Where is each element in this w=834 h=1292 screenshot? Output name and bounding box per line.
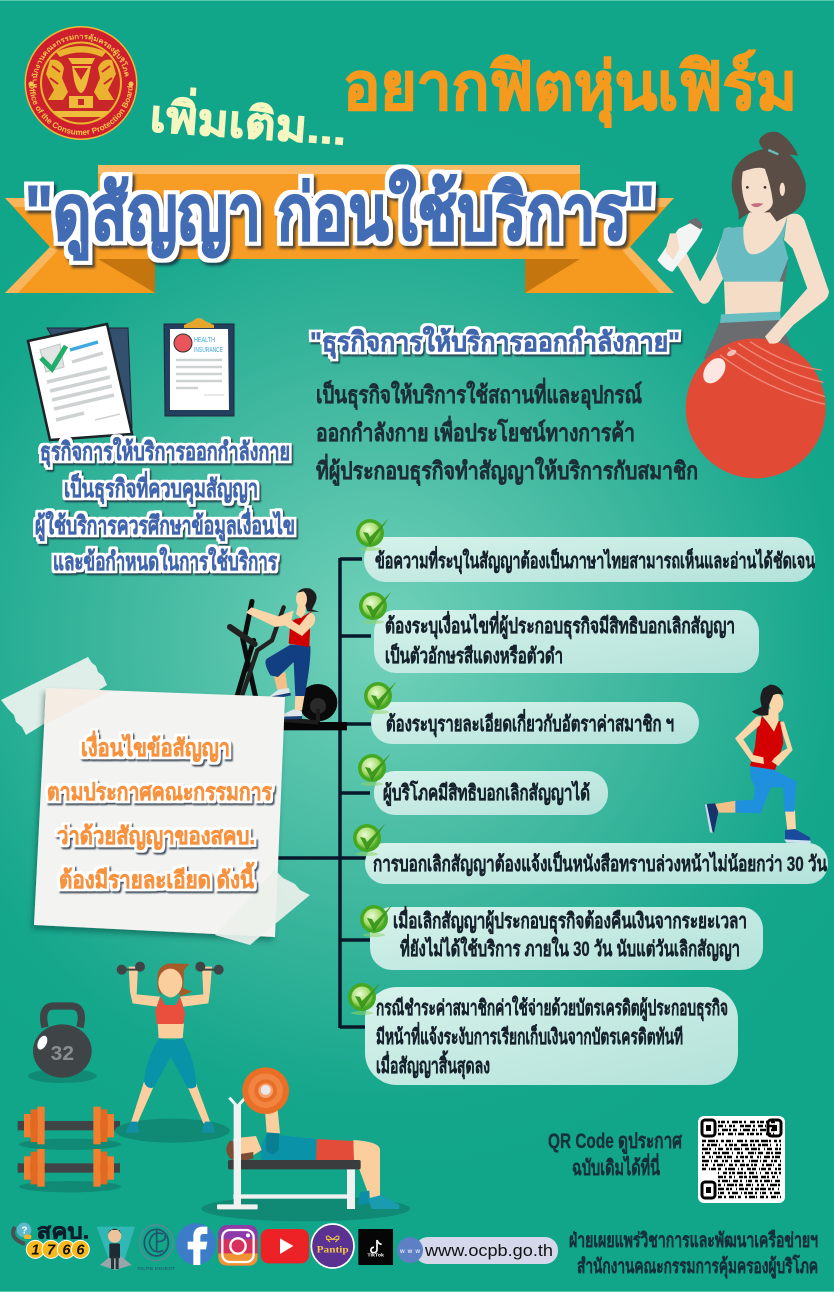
heading: definition of fitness business: "ธุรกิจการให้บริการออกกำลังกาย" bbox=[310, 326, 680, 359]
icon: check 1 bbox=[356, 519, 388, 551]
item 5 bbox=[353, 824, 828, 884]
logo: consumer protection board seal: สำนักงานคณะกรรมการคุ้มครองผู้บริโภค bbox=[32, 34, 129, 88]
title: อยากฟิตหุ่นเฟิร์ม: อยากฟิตหุ่นเฟิร์ม bbox=[343, 49, 797, 128]
item 4: ผู้บริโภคมีสิทธิบอกเลิกสัญญาได้ bbox=[383, 780, 590, 807]
icon: check 2 bbox=[359, 592, 391, 624]
footer: pantip: Pantip bbox=[317, 1245, 349, 1255]
item 6 bbox=[360, 905, 763, 970]
item 2 bbox=[359, 592, 759, 673]
footer: สคบ 1766 hotline: สคบ. bbox=[37, 1219, 89, 1243]
definition paragraph: ที่ผู้ประกอบธุรกิจทำสัญญาให้บริการกับสมาชิก bbox=[316, 453, 698, 487]
footer: instagram bbox=[218, 1225, 258, 1266]
illustration: gym figures (kettlebell, dumbbells, woman lifting, bench press) bbox=[18, 962, 410, 1221]
icon: check 6 bbox=[360, 905, 392, 937]
definition paragraph bbox=[316, 377, 698, 487]
QR code caption: ฉบับเดิมได้ที่นี่ bbox=[572, 1152, 660, 1180]
footer: pantip bbox=[311, 1224, 354, 1268]
note text: contract conditions: เงื่อนไขข้อสัญญา bbox=[81, 730, 230, 762]
item 7: เมื่อสัญญาสิ้นสุดลง bbox=[376, 1050, 490, 1080]
subtitle: เพิ่มเติม: เพิ่มเติม... bbox=[148, 85, 349, 155]
footer: สคบ 1766 hotline: 6 bbox=[76, 1243, 85, 1259]
item 1 bbox=[356, 519, 815, 582]
kettlebell bbox=[28, 1006, 97, 1083]
item 3: ต้องระบุรายละเอียดเกี่ยวกับอัตราค่าสมาชิก ฯ bbox=[386, 708, 674, 738]
icon: check 4 bbox=[358, 754, 390, 786]
illustration: woman with water bottle on exercise ball bbox=[657, 132, 829, 478]
logo: consumer protection board seal bbox=[24, 26, 138, 140]
item 7 bbox=[348, 983, 738, 1085]
footer: youtube bbox=[261, 1229, 309, 1263]
definition paragraph: ออกกำลังกาย เพื่อประโยชน์ทางการค้า bbox=[316, 415, 635, 447]
definition paragraph: เป็นธุรกิจให้บริการใช้สถานที่และอุปกรณ์ bbox=[316, 377, 642, 411]
illustration: health insurance clipboard: HEALTH bbox=[194, 337, 215, 344]
footer: website pill: www.ocpb.go.th bbox=[424, 1242, 553, 1260]
sticky note with tape bbox=[1, 657, 310, 945]
left text: controlled contract business: ธุรกิจการให้บริการออกกำลังกาย bbox=[40, 436, 290, 468]
banner heading: "ดูสัญญา ก่อนใช้บริการ" bbox=[25, 169, 655, 260]
footer: tiktok: TikTok bbox=[367, 1253, 385, 1258]
note text: contract conditions: ว่าด้วยสัญญาของสคบ. bbox=[57, 823, 255, 850]
footer: สคบ 1766 hotline: 1 bbox=[31, 1243, 39, 1259]
note text: contract conditions bbox=[47, 730, 272, 894]
left text: controlled contract business: เป็นธุรกิจที่ควบคุมสัญญา bbox=[64, 471, 258, 505]
tree connector lines bbox=[276, 558, 372, 1028]
left text: controlled contract business: ผู้ใช้บริการควรศึกษาข้อมูลเงื่อนไข bbox=[35, 508, 295, 542]
QR code caption bbox=[548, 1130, 682, 1180]
footer: issuing department bbox=[569, 1229, 818, 1280]
item 2: เป็นตัวอักษรสีแดงหรือตัวดำ bbox=[385, 642, 563, 668]
item 7: มีหน้าที่แจ้งระงับการเรียกเก็บเงินจากบัตรเครดิตทันที bbox=[376, 1021, 683, 1049]
ribbon banner bbox=[5, 165, 674, 293]
footer: สคบ 1766 hotline: ? bbox=[21, 1225, 27, 1236]
illustration: woman on elliptical trainer bbox=[230, 588, 347, 730]
footer: facebook bbox=[176, 1223, 216, 1265]
footer: circular logo: OCPB DIGEST bbox=[137, 1266, 175, 1272]
footer: tiktok bbox=[358, 1229, 393, 1265]
footer: สคบ 1766 hotline: 7 bbox=[47, 1243, 56, 1259]
footer: website pill: www bbox=[399, 1249, 420, 1255]
logo: consumer protection board seal: Office of the Consumer Protection Board bbox=[29, 83, 133, 136]
note text: contract conditions: ต้องมีรายละเอียด ดังนี้ bbox=[59, 861, 255, 894]
left text: controlled contract business bbox=[35, 436, 295, 576]
illustration: health insurance clipboard: INSURANCE bbox=[194, 347, 223, 354]
bench press bbox=[201, 1067, 410, 1221]
icon: check 3 bbox=[364, 682, 396, 714]
illustration: health insurance clipboard bbox=[164, 318, 234, 416]
note text: contract conditions: ตามประกาศคณะกรรมการ bbox=[47, 779, 272, 806]
footer: website pill bbox=[397, 1237, 558, 1264]
icon: check 7 bbox=[348, 983, 380, 1015]
item 4 bbox=[358, 754, 608, 815]
QR code bbox=[698, 1116, 785, 1203]
footer: circular logo bbox=[137, 1225, 175, 1272]
illustration: signed document bbox=[28, 324, 132, 440]
QR code caption: QR Code ดูประกาศ bbox=[548, 1130, 682, 1155]
left text: controlled contract business: และข้อกำหนดในการใช้บริการ bbox=[53, 546, 277, 576]
woman lifting dumbbells bbox=[115, 962, 230, 1143]
icon: check 5 bbox=[353, 824, 385, 856]
kettlebell: 32 bbox=[51, 1043, 74, 1065]
footer: สคบ 1766 hotline bbox=[13, 1219, 89, 1259]
dumbbells bbox=[18, 1107, 121, 1192]
item 3 bbox=[364, 682, 699, 744]
footer: cartoon man bbox=[97, 1227, 135, 1270]
illustration: lunging woman bbox=[705, 685, 811, 843]
footer: สคบ 1766 hotline: 6 bbox=[62, 1243, 71, 1259]
